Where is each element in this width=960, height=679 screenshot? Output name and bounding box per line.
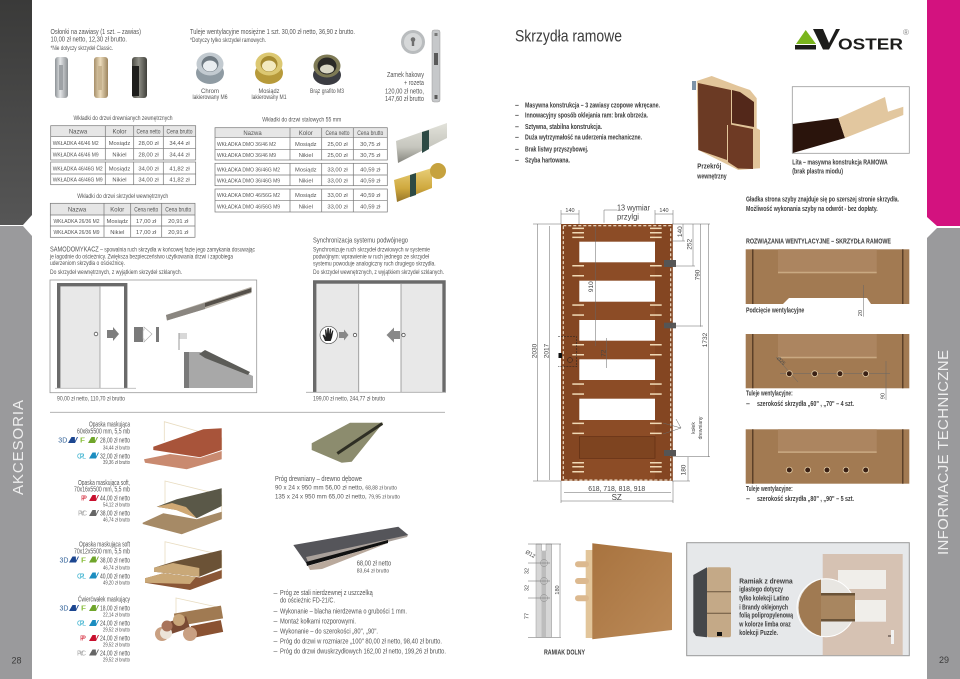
caption: four sleeves: Tuleje wentylacyjne:: [746, 391, 793, 398]
hook lock caption: Zamek hakowy: [387, 72, 424, 79]
product: casing 60x8: 3D: [58, 438, 67, 445]
image: magnifier circle: [797, 579, 855, 637]
arrow: outline: [143, 327, 152, 342]
features bullet list: –: [515, 112, 519, 119]
product: quarter round: 24,00 zł netto: [100, 650, 130, 657]
ventilation sleeves text: [190, 27, 355, 44]
caption: undercut: Podcięcie wentylacyjne: [746, 308, 804, 315]
ventilation option: undercut: 20: [858, 310, 864, 316]
product: soft casing 70x16: 46,74 zł brutto: [103, 518, 130, 524]
synchronisation description: Do skrzydeł wewnętrznych, z wyjątkiem skrzydeł szklanych.: [313, 270, 444, 276]
dimension lines: [533, 210, 710, 503]
table: steel door inserts: Nikiel: [299, 153, 313, 159]
features bullet list: –: [515, 135, 519, 142]
features bullet list: –: [515, 102, 519, 109]
product: soft casing 70x12: 3D: [60, 557, 68, 564]
dimension labels: [532, 204, 709, 502]
caption: five sleeves: [746, 486, 854, 503]
callout text: Ramiak z drewna: [739, 578, 793, 585]
callout text: i Brandy oklejonych: [739, 604, 788, 611]
hook lock caption: + rozeta: [404, 80, 424, 87]
steel threshold bullet list: Wykonanie – do szerokości „80", „90".: [280, 628, 378, 635]
bottom rail drawing: Ø12: [524, 550, 536, 560]
features bullet list: Szyba hartowana.: [525, 157, 570, 164]
table: steel door inserts: 40,59 zł: [360, 204, 381, 210]
dimension labels: 140: [677, 226, 684, 237]
table: steel door inserts: 30,75 zł: [360, 142, 381, 148]
product: quarter round: Ćwierćwałek maskujący: [78, 595, 130, 604]
caption: four sleeves: –: [746, 401, 750, 408]
ventilation option: four sleeves: Ø25: [775, 356, 786, 367]
product: casing 60x8: 32,00 zł netto: [100, 453, 130, 460]
table: steel door inserts: Mosiądz: [295, 168, 317, 174]
table: exterior wooden door inserts: 28,00 zł: [138, 141, 159, 147]
table: exterior wooden door inserts: Nazwa: [69, 130, 88, 136]
ventilation option: four sleeves: [746, 334, 909, 400]
table: interior door inserts: Nikiel: [110, 230, 124, 236]
voster logo: [795, 28, 909, 54]
sidebar label: akcesoria: AKCESORIA: [10, 400, 27, 495]
caption: solid frame: Lita – masywna konstrukcja RAMOWA: [792, 159, 888, 166]
table: steel door inserts: Cena brutto: [357, 131, 384, 137]
product: casing 60x8: CPL: [77, 453, 86, 460]
product: casing 60x8: 39,36 zł brutto: [103, 460, 130, 466]
voster logo: ®: [903, 28, 909, 37]
product: casing 60x8: [58, 422, 130, 466]
image: bottom rail with dowels: [578, 543, 672, 639]
steel threshold bullet list: Próg do drzwi dwuskrzydłowych 162,00 zł netto, 199,26 zł brutto.: [280, 648, 446, 655]
steel threshold bullet list: Próg ze stali nierdzewnej z uszczelką: [280, 590, 373, 597]
glass note: Możliwość wykonania szyby na odwrót - bez dopłaty.: [746, 206, 878, 213]
ventilation option: five sleeves: [746, 429, 909, 484]
voster logo: OSTER: [838, 36, 903, 54]
product: quarter round: CPL: [77, 621, 86, 628]
product: quarter round: PVC: [77, 650, 86, 657]
table: exterior wooden door inserts: Nikiel: [112, 178, 127, 184]
hinge covers text: [50, 27, 141, 52]
table: steel door inserts: Nikiel: [299, 204, 313, 210]
steel threshold bullet list: Próg do drzwi w rozmiarze „100" 80,00 zł netto, 98,40 zł brutto.: [280, 638, 442, 645]
product: quarter round: [60, 595, 130, 664]
steel threshold price: 83,64 zł brutto: [357, 568, 389, 574]
product: quarter round: 29,52 zł brutto: [103, 658, 130, 664]
steel threshold bullet list: –: [274, 648, 278, 655]
product: soft casing 70x16: PVC: [78, 511, 87, 518]
technical door drawing: [532, 204, 710, 503]
sleeve captions: Chrom: [201, 89, 219, 95]
icon: cylinder lock: [396, 123, 447, 163]
section heading: ventilation: ROZWIĄZANIA WENTYLACYJNE – SKRZYDŁA RAMOWE: [746, 238, 891, 245]
steel threshold bullet list: –: [274, 638, 278, 645]
synchronisation description: systemu powoduje analogiczny ruch drugiego skrzydła.: [313, 261, 436, 267]
door closer description: uderzeniom skrzydła o ościeżnicę.: [50, 261, 125, 267]
door closer panel: [50, 280, 257, 393]
hook lock caption: 120,00 zł netto,: [385, 88, 424, 96]
icon: brass sleeve: [255, 52, 283, 84]
table: exterior wooden door inserts: Kolor: [112, 130, 127, 136]
hook lock caption: 147,60 zł brutto: [385, 96, 424, 103]
product: soft casing 70x16: Opaska maskująca soft,: [78, 480, 130, 487]
table: interior door inserts: WKŁADKA 26/36 M9: [54, 230, 100, 236]
table: exterior wooden door inserts: WKŁADKA 46/46 M9: [53, 152, 99, 158]
icon: cylinder lock with knob: [394, 163, 446, 202]
features bullet list: Duża wytrzymałość na uderzenia mechaniczne.: [525, 135, 642, 142]
table: steel door inserts: Nazwa: [243, 131, 262, 137]
table: exterior wooden door inserts: Mosiądz: [109, 166, 130, 172]
table: steel door inserts: 33,00 zł: [327, 193, 348, 199]
dimension labels: 2017: [544, 343, 550, 358]
bottom rail drawing: 77: [524, 613, 530, 619]
steel threshold bullet list: –: [274, 618, 278, 625]
features bullet list: Brak listwy przyszybowej.: [525, 146, 588, 153]
synchronisation description: Synchronizuje ruch skrzydeł drzwiowych w systemie: [313, 248, 431, 254]
table: steel door inserts: 40,59 zł: [360, 193, 381, 199]
table: interior door inserts: 17,00 zł: [136, 219, 157, 225]
product: casing 60x8: 60x8x5500 mm, 5,5 mb: [77, 428, 130, 435]
caption: five sleeves: szerokość skrzydła „80" , „90" – 5 szt.: [757, 496, 854, 503]
image: solid frame construction: [792, 87, 909, 153]
product: soft casing 70x12: 38,00 zł netto: [100, 557, 130, 564]
image: soft casing 70x16: [143, 481, 222, 534]
caption: five sleeves: –: [746, 496, 750, 503]
features bullet list: Innowacyjny sposób oklejania ram: brak obrzeża.: [525, 112, 648, 119]
dimension labels: 13 wymiar: [617, 204, 650, 213]
table: exterior wooden door inserts: Cena brutto: [166, 130, 193, 136]
wooden threshold text: 135 x 24 x 950 mm 65,00 zł netto, 79,95 zł brutto: [275, 493, 400, 500]
caption: cross section: [697, 163, 727, 180]
table: exterior wooden door inserts: 41,82 zł: [169, 178, 190, 184]
table: interior door inserts: Cena netto: [134, 208, 159, 214]
table: steel door inserts: 40,59 zł: [360, 168, 381, 174]
callout text: kolekcji Puzzle.: [739, 630, 778, 637]
dimension labels: drewniany: [698, 416, 704, 439]
product: soft casing 70x16: 70x16x5500 mm, 5,5 mb: [74, 487, 130, 494]
table: steel door inserts: Mosiądz: [295, 142, 317, 148]
callout: softwood rail: [687, 543, 909, 656]
table: steel door inserts: 33,00 zł: [327, 178, 348, 184]
hinge covers text: Osłonki na zawiasy (1 szt. – zawias): [50, 27, 141, 36]
table: steel door inserts: Cena netto: [326, 131, 350, 137]
steel threshold bullet list: Wykonanie – blacha nierdzewna o grubości 1 mm.: [280, 608, 407, 615]
image: soft casing 70x12: [145, 542, 222, 590]
dimension labels: 140: [565, 208, 575, 214]
table: steel door inserts: Mosiądz: [295, 193, 317, 199]
product: quarter round: 29,52 zł brutto: [103, 628, 130, 634]
table: steel door inserts: Nikiel: [299, 178, 313, 184]
table: steel door inserts: 25,00 zł: [327, 153, 348, 159]
product: quarter round: FF: [81, 606, 86, 613]
table: steel door inserts: 33,00 zł: [327, 204, 348, 210]
steel threshold bullet list: [274, 590, 446, 655]
table: steel door inserts: WKŁADKA DMO 46/56G M9: [217, 204, 280, 210]
caption: solid frame: (brak plastra miodu): [792, 168, 843, 175]
hinge covers text: *Nie dotyczy skrzydeł Classic.: [50, 46, 113, 52]
table: exterior wooden door inserts: WKŁADKA 46/46G M9: [53, 178, 103, 184]
product: quarter round: 18,00 zł netto: [100, 606, 130, 613]
features bullet list: Sztywna, stabilna konstrukcja.: [525, 124, 602, 131]
table: exterior wooden door inserts: 34,44 zł: [169, 152, 190, 158]
synchronisation description: [313, 235, 444, 276]
product: casing 60x8: Opaska maskująca: [89, 422, 130, 429]
table: interior door inserts: 17,00 zł: [136, 230, 157, 236]
door leaf: [561, 224, 673, 481]
ventilation option: four sleeves: 90: [880, 393, 886, 399]
sleeve captions: lakierowany M1: [252, 95, 287, 101]
table: interior door inserts: WKŁADKA 26/36 M2: [54, 219, 100, 225]
table: steel door inserts: 30,75 zł: [360, 153, 381, 159]
right sidebar: [927, 0, 960, 679]
product: soft casing 70x12: 70x12x5500 mm, 5,5 mb: [74, 548, 130, 555]
caption: bottom rail: RAMIAK DOLNY: [544, 649, 585, 656]
product: soft casing 70x12: CPL: [77, 573, 86, 580]
table: exterior wooden door inserts: 34,44 zł: [169, 141, 190, 147]
hinges and lock: [558, 260, 676, 456]
callout text: [739, 578, 793, 637]
product: casing 60x8: 28,00 zł netto: [100, 438, 130, 445]
synchronisation price: 199,00 zł netto, 244,77 zł brutto: [313, 397, 386, 403]
dimension labels: przylgi: [617, 212, 639, 221]
steel threshold bullet list: Montaż kołkami rozporowymi.: [280, 618, 356, 625]
door closer description: SAMODOMYKACZ – spowalnia ruch skrzydła w końcowej fazie jego zamykania dosuwając: [50, 245, 256, 254]
features bullet list: Masywna konstrukcja – 3 zawiasy czopowe wkręcane.: [525, 102, 660, 109]
image: rail profile: [693, 567, 731, 637]
dimension labels: 252: [686, 238, 694, 250]
bottom rail drawing: 32: [524, 585, 530, 591]
image: steel threshold: [293, 527, 408, 570]
table: interior door inserts: 20,91 zł: [168, 230, 189, 236]
product: soft casing 70x16: 44,00 zł netto: [100, 496, 130, 503]
steel threshold bullet list: –: [274, 628, 278, 635]
dimension labels: 618, 718, 818, 918: [588, 484, 645, 493]
ventilation sleeves text: *Dotyczy tylko skrzydeł ramowych.: [190, 38, 266, 44]
caption: four sleeves: szerokość skrzydła „60" , „70" – 4 szt.: [757, 401, 854, 408]
closer rail image: [166, 287, 252, 320]
features bullet list: –: [515, 146, 519, 153]
dimension labels: 140: [659, 208, 669, 214]
bottom rail drawing: [524, 544, 561, 637]
door closer price: 90,00 zł netto, 110,70 zł brutto: [57, 397, 126, 403]
table: exterior wooden door inserts: WKŁADKA 46/46 M2: [53, 141, 99, 147]
glass note: [746, 197, 899, 213]
product: quarter round: 24,00 zł netto: [100, 636, 130, 643]
arrow: push: [339, 330, 348, 340]
steel threshold price: 68,00 zł netto: [357, 561, 391, 568]
table: steel door inserts: 25,00 zł: [327, 142, 348, 148]
image: door behind: [823, 554, 903, 655]
dimension labels: 1732: [702, 332, 709, 347]
bottom rail drawing: 180: [555, 585, 561, 595]
callout text: iglastego dotyczy: [739, 587, 783, 594]
image: wooden threshold: [312, 423, 383, 463]
arrow: closing direction: [107, 327, 119, 341]
product: soft casing 70x12: 49,20 zł brutto: [103, 580, 130, 586]
table: steel door inserts: Kolor: [299, 131, 313, 137]
synchronisation description: Synchronizacja systemu podwójnego: [313, 235, 408, 244]
table: exterior wooden door inserts: WKŁADKA 46/46G M2: [53, 166, 103, 172]
table: exterior wooden door inserts: Cena netto: [136, 130, 161, 136]
image: quarter round: [155, 598, 222, 641]
sleeve captions: Brąz grafito M3: [310, 89, 345, 95]
icon: graphite sleeve: [313, 54, 341, 85]
ventilation sleeves text: Tuleje wentylacyjne mosiężne 1 szt. 30,00 zł netto, 36,90 z brutto.: [190, 27, 355, 36]
callout text: folią polipropylenową: [739, 613, 793, 620]
hook lock rosette icon: [401, 30, 425, 54]
steel threshold bullet list: –: [274, 608, 278, 615]
caption: five sleeves: Tuleje wentylacyjne:: [746, 486, 793, 493]
wooden threshold text: 90 x 24 x 950 mm 56,00 zł netto, 68,88 zł brutto: [275, 484, 397, 491]
table: exterior wooden door inserts: [51, 116, 196, 185]
steel threshold price: [357, 561, 391, 574]
table: interior door inserts: Wkładki do drzwi skrzydeł wewnętrznych: [77, 194, 168, 200]
steel threshold bullet list: –: [274, 590, 278, 597]
caption: cross section: wewnętrzny: [697, 173, 727, 180]
closer installation image: [179, 333, 253, 388]
table: interior door inserts: [50, 194, 195, 237]
table: exterior wooden door inserts: 28,00 zł: [138, 152, 159, 158]
table: exterior wooden door inserts: Mosiądz: [109, 141, 130, 147]
product: quarter round: PP: [80, 636, 86, 643]
table: steel door inserts: [215, 117, 387, 212]
door closer description: Do skrzydeł wewnętrznych, z wyjątkiem skrzydeł szklanych.: [50, 270, 182, 276]
product: soft casing 70x12: 40,00 zł netto: [100, 573, 130, 580]
hook lock caption: [385, 72, 424, 103]
dimension labels: 2030: [532, 343, 538, 358]
product: casing 60x8: 34,44 zł brutto: [103, 445, 130, 451]
table: exterior wooden door inserts: Nikiel: [112, 152, 127, 158]
callout text: tylko kolekcji Latino: [739, 596, 789, 603]
features bullet list: [515, 102, 660, 164]
dimension labels: 72: [600, 349, 608, 357]
table: exterior wooden door inserts: 34,00 zł: [138, 178, 159, 184]
arrow: follow: [386, 328, 400, 342]
features bullet list: –: [515, 157, 519, 164]
table: exterior wooden door inserts: Wkładki do drzwi drewnianych zewnętrznych: [74, 116, 172, 122]
sidebar label: informacje techniczne: INFORMACJE TECHNICZNE: [935, 350, 952, 555]
caption: cross section: Przekrój: [697, 163, 721, 170]
product: soft casing 70x16: 38,00 zł netto: [100, 511, 130, 518]
product: soft casing 70x16: PP: [81, 496, 87, 503]
icon: chrome sleeve: [196, 52, 224, 84]
product: soft casing 70x12: FF: [81, 557, 86, 564]
table: steel door inserts: WKŁADKA DMO 36/46 M9: [217, 153, 276, 159]
synchronisation panel: [306, 282, 446, 392]
product: soft casing 70x16: [74, 480, 130, 524]
product: soft casing 70x12: Opaska maskująca soft: [79, 542, 130, 549]
callout text: w kolorze limba oraz: [739, 622, 791, 629]
table: steel door inserts: Wkładki do drzwi stalowych 55 mm: [262, 117, 341, 123]
dimension labels: 790: [694, 269, 702, 280]
door closer description: [49, 245, 256, 276]
caption: solid frame: [792, 159, 888, 175]
left sidebar: [0, 0, 32, 679]
caption: four sleeves: [746, 391, 854, 408]
dimension labels: SZ: [612, 493, 622, 502]
table: steel door inserts: WKŁADKA DMO 36/46G M9: [217, 178, 280, 184]
ventilation option: undercut: [746, 249, 909, 317]
bottom rail drawing: 32: [524, 568, 530, 574]
image: door cross section: [692, 76, 760, 170]
product: quarter round: 22,14 zł brutto: [103, 613, 130, 619]
hinge covers text: 10,00 zł netto, 12,30 zł brutto.: [50, 35, 127, 44]
table: steel door inserts: WKŁADKA DMO 36/46G M2: [217, 168, 280, 174]
product: soft casing 70x16: 54,12 zł brutto: [103, 503, 130, 509]
page number 28: 28: [12, 656, 22, 666]
steel threshold bullet list: do ościeżnic FD-21/C.: [280, 598, 335, 605]
features bullet list: –: [515, 124, 519, 131]
glass note: Gładka strona szyby znajduje się po szerszej stronie skrzydła.: [746, 197, 899, 204]
table: exterior wooden door inserts: 41,82 zł: [169, 166, 190, 172]
product: casing 60x8: FF: [80, 438, 85, 445]
hinge covers images: [55, 57, 147, 98]
table: interior door inserts: Kolor: [110, 208, 124, 214]
synchronisation description: podwójnym: wprawienie w ruch jednego ze skrzydeł: [313, 255, 430, 261]
product: soft casing 70x12: [60, 542, 130, 586]
icon: hand: [320, 326, 337, 344]
table: steel door inserts: 40,59 zł: [360, 178, 381, 184]
door closer description: je łagodnie do ościeżnicy. Zwiększa bezpieczeństwo użytkowania drzwi i zapobiega: [49, 255, 234, 261]
sleeve captions: lakierowany M6: [192, 95, 228, 101]
table: exterior wooden door inserts: 34,00 zł: [138, 166, 159, 172]
table: interior door inserts: 20,91 zł: [168, 219, 189, 225]
page number 29: 29: [939, 655, 949, 665]
table: interior door inserts: Cena brutto: [165, 208, 192, 214]
product: quarter round: 3D: [60, 606, 68, 613]
table: steel door inserts: WKŁADKA DMO 46/56G M2: [217, 193, 280, 199]
title: Skrzydła ramowe: [515, 27, 622, 46]
image: casing 60x8: [144, 422, 222, 469]
product: quarter round: 29,52 zł brutto: [103, 643, 130, 649]
table: steel door inserts: 33,00 zł: [327, 168, 348, 174]
product: soft casing 70x12: 46,74 zł brutto: [103, 565, 130, 571]
wooden threshold text: [275, 476, 400, 500]
dimension labels: kołek: [691, 422, 697, 434]
product: quarter round: 24,00 zł netto: [100, 621, 130, 628]
sleeve captions: Mosiądz: [258, 89, 280, 95]
hook lock plate icon: [432, 30, 440, 102]
dimension labels: 180: [680, 464, 688, 475]
table: interior door inserts: Mosiądz: [107, 219, 128, 225]
sleeve captions: [192, 89, 345, 101]
wooden threshold text: Próg drewniany – drewno dębowe: [275, 476, 362, 483]
dimension labels: 910: [588, 281, 595, 292]
table: interior door inserts: Nazwa: [68, 208, 87, 214]
table: steel door inserts: WKŁADKA DMO 36/46 M2: [217, 142, 276, 148]
